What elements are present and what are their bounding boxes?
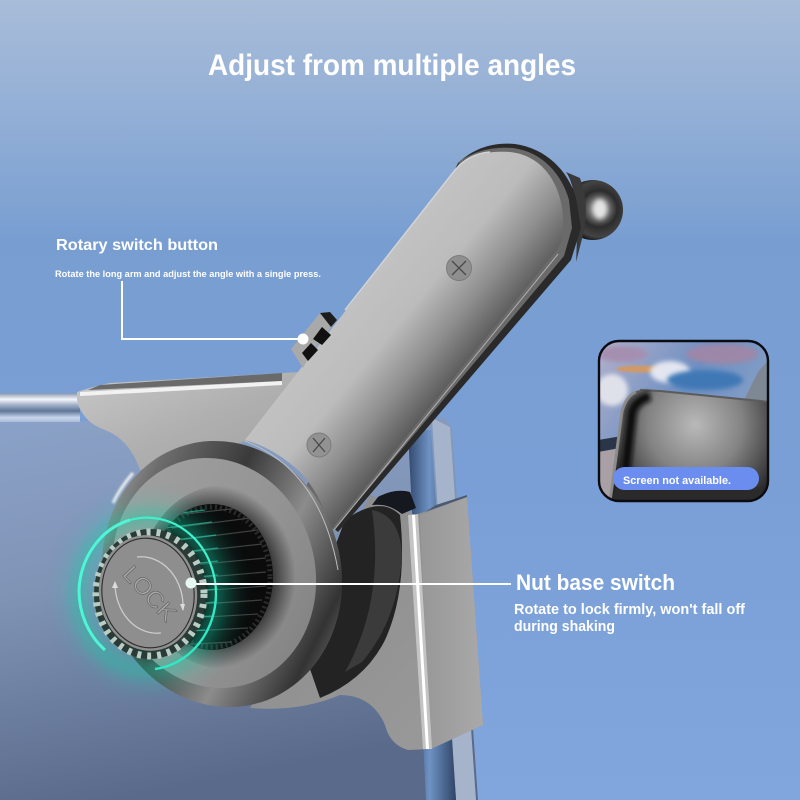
LOCK cap	[91, 529, 205, 657]
title: Adjust from multiple angles	[208, 49, 576, 82]
rotary switch button	[291, 312, 337, 368]
text: rotary switch description: Rotate the long arm and adjust the angle with a single press.	[55, 269, 321, 280]
inset panel: screen not available	[596, 340, 770, 502]
LOCK label: LOCK	[118, 560, 182, 627]
teal glow ring	[78, 514, 222, 674]
text: nut base description	[514, 602, 745, 635]
inset: bracket shape	[610, 390, 770, 502]
bracket plate	[77, 372, 483, 750]
heading: nut base switch: Nut base switch	[516, 570, 675, 595]
long arm	[245, 144, 581, 532]
arm screw lower	[307, 433, 331, 457]
arm screw upper	[446, 256, 472, 280]
black hinge body	[300, 491, 416, 698]
ball joint	[563, 172, 623, 262]
disc hinge	[72, 414, 372, 734]
text: nut base description: Rotate to lock firmly, won't fall off	[514, 602, 745, 618]
text: nut base description: during shaking	[514, 619, 615, 635]
splined shaft	[164, 504, 273, 650]
heading: rotary switch button: Rotary switch button	[56, 237, 218, 254]
inset: pill label: Screen not available.	[623, 475, 731, 487]
callout line: nut base switch	[186, 578, 511, 588]
tablet screen	[0, 393, 478, 800]
lock nut gear	[94, 529, 206, 659]
teal ring front	[79, 518, 216, 669]
inset: pill label	[613, 467, 759, 490]
callout line: rotary switch	[122, 281, 308, 344]
